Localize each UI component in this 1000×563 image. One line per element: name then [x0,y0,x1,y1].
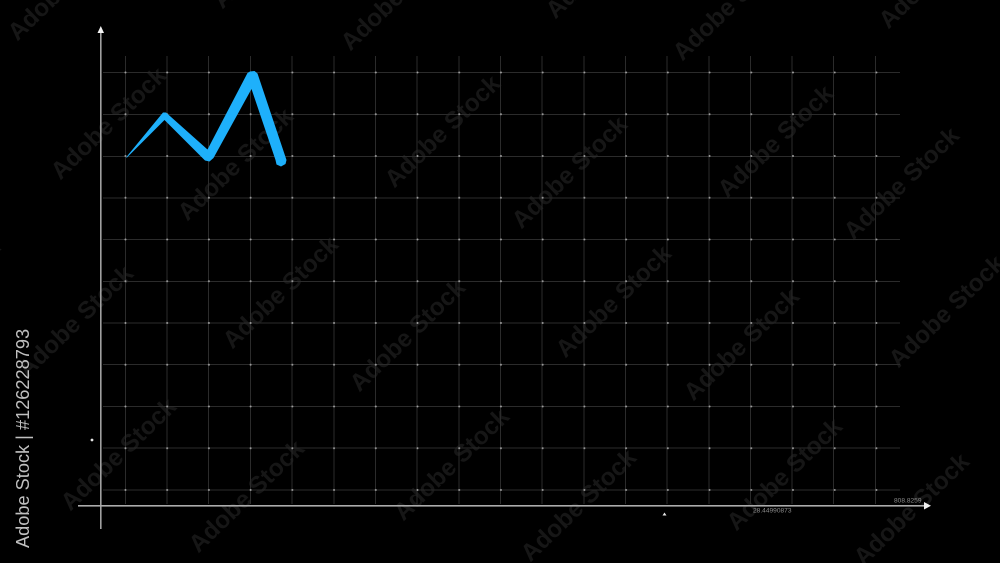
x axis with arrow [78,502,931,510]
marker dot on y axis side [91,439,93,441]
watermark pattern: Adobe Stock [46,62,172,185]
watermark pattern: Adobe Stock [679,283,805,406]
grid intersection dots [110,62,890,498]
y axis with arrow [98,26,104,529]
watermark pattern: Adobe Stock [722,413,848,536]
watermark pattern: Adobe Stock [839,122,965,245]
watermark pattern: Adobe Stock [551,240,677,363]
chart grid [103,56,900,504]
watermark pattern: Adobe Stock [380,70,506,193]
watermark pattern: Adobe Stock [389,403,515,526]
watermark pattern: Adobe Stock [173,103,299,226]
vertical stock id text: Adobe Stock | #126228793 [13,329,33,548]
blue tapered line series [126,71,286,166]
watermark pattern: Adobe Stock [56,393,182,516]
watermark pattern: Adobe Stock [218,231,344,354]
watermark pattern: Adobe Stock [713,80,839,203]
x axis value label: maximum: 808.8259 [894,498,922,504]
x axis value label: current: 28.44990873 [753,508,792,514]
watermark pattern: Adobe Stock [13,260,139,383]
marker triangle on x axis side [662,512,666,516]
watermark pattern: Adobe Stock [507,111,633,234]
watermark pattern: Adobe Stock [184,435,310,558]
watermark pattern: Adobe Stock [345,274,471,397]
